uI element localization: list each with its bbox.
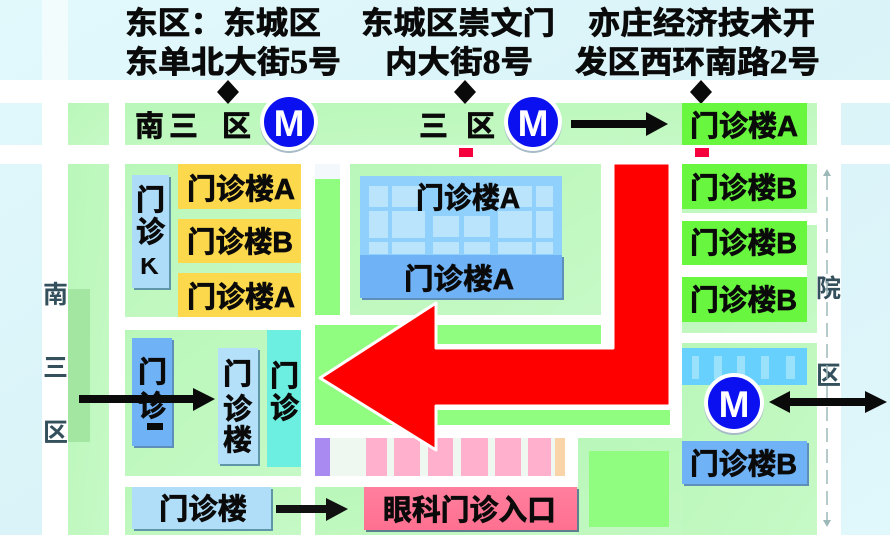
right green buildings: 门诊楼A xyxy=(690,110,798,143)
red markers xyxy=(459,148,709,157)
central building lower: 门诊楼A xyxy=(404,263,514,296)
central building upper xyxy=(360,176,562,256)
eye clinic entrance xyxy=(364,487,579,532)
right green buildings: 门诊楼B xyxy=(690,227,797,260)
teal vertical building xyxy=(267,330,301,467)
metro icon 1: M xyxy=(274,103,304,144)
light blue vertical building: 门 xyxy=(223,358,252,391)
right green buildings: 门诊楼B xyxy=(690,284,797,317)
south route label: 三 xyxy=(43,354,68,382)
south route label: 南 xyxy=(43,281,68,309)
south route label: 区 xyxy=(43,419,68,447)
header addresses: 内大街8号 xyxy=(385,44,533,81)
arrow: left entry xyxy=(79,388,215,411)
header addresses: 东区：东城区 xyxy=(125,6,321,41)
vertical building K xyxy=(132,175,171,290)
road labels top: 三 xyxy=(419,111,448,143)
bottom building: 门诊楼 xyxy=(159,493,247,526)
header addresses: 亦庄经济技术开 xyxy=(588,6,815,41)
left blue building xyxy=(132,338,174,448)
metro icon 2: M xyxy=(518,103,548,144)
striped blue building xyxy=(682,348,807,385)
left blue building: 诊 xyxy=(138,390,168,423)
metro icon 2 xyxy=(504,93,562,153)
arrow: double xyxy=(769,391,887,413)
east route label xyxy=(816,275,841,390)
vertical building K: 门 xyxy=(136,184,165,217)
blue building B xyxy=(682,441,809,486)
dashed road line xyxy=(823,169,831,527)
road labels top xyxy=(135,110,495,143)
header addresses xyxy=(125,6,820,81)
light blue vertical building: 楼 xyxy=(223,424,252,457)
header addresses: 东单北大街 5号 xyxy=(125,44,341,81)
green ground blocks xyxy=(68,103,817,535)
right green buildings xyxy=(682,103,807,322)
teal vertical building: 门 xyxy=(270,360,299,393)
vertical building K: K xyxy=(140,250,159,280)
header addresses: 东城区崇文门 xyxy=(361,6,555,41)
light blue vertical building: 诊 xyxy=(223,393,253,426)
yellow buildings: 门诊楼B xyxy=(187,226,293,259)
south route label xyxy=(43,281,68,447)
header addresses: 发区西环南路 2号 xyxy=(575,44,820,81)
blue building B: 门诊楼B xyxy=(690,448,797,481)
bright green lawns xyxy=(68,179,670,527)
eye clinic entrance: 眼科门诊入口 xyxy=(383,494,556,527)
metro icon 3 xyxy=(704,373,764,435)
road labels top: 区 xyxy=(222,111,251,143)
right green buildings: 门诊楼B xyxy=(690,172,797,205)
left blue building: 门 xyxy=(138,356,167,389)
clinic strip xyxy=(315,438,565,476)
yellow buildings xyxy=(178,164,301,317)
arrow: bottom xyxy=(276,498,348,521)
road labels top: 南 xyxy=(135,110,164,143)
central building lower xyxy=(360,255,564,300)
big red arrow xyxy=(320,163,670,450)
yellow buildings: 门诊楼A xyxy=(187,173,295,206)
road labels top: 区 xyxy=(466,111,495,143)
pointer diamonds xyxy=(217,80,712,104)
bottom building xyxy=(132,487,273,531)
yellow buildings: 门诊楼A xyxy=(187,281,295,314)
light blue vertical building xyxy=(218,348,260,466)
east route label: 院 xyxy=(816,275,841,303)
road labels top: 三 xyxy=(169,111,198,143)
metro icon 1 xyxy=(260,93,318,153)
vertical building K: 诊 xyxy=(136,216,166,249)
central building upper: 门诊楼A xyxy=(416,182,520,215)
teal vertical building: 诊 xyxy=(270,392,300,425)
metro icon 3: M xyxy=(719,384,749,425)
east route label: 区 xyxy=(816,362,841,390)
white gaps between right buildings xyxy=(682,265,807,277)
arrow: top right xyxy=(571,112,668,136)
